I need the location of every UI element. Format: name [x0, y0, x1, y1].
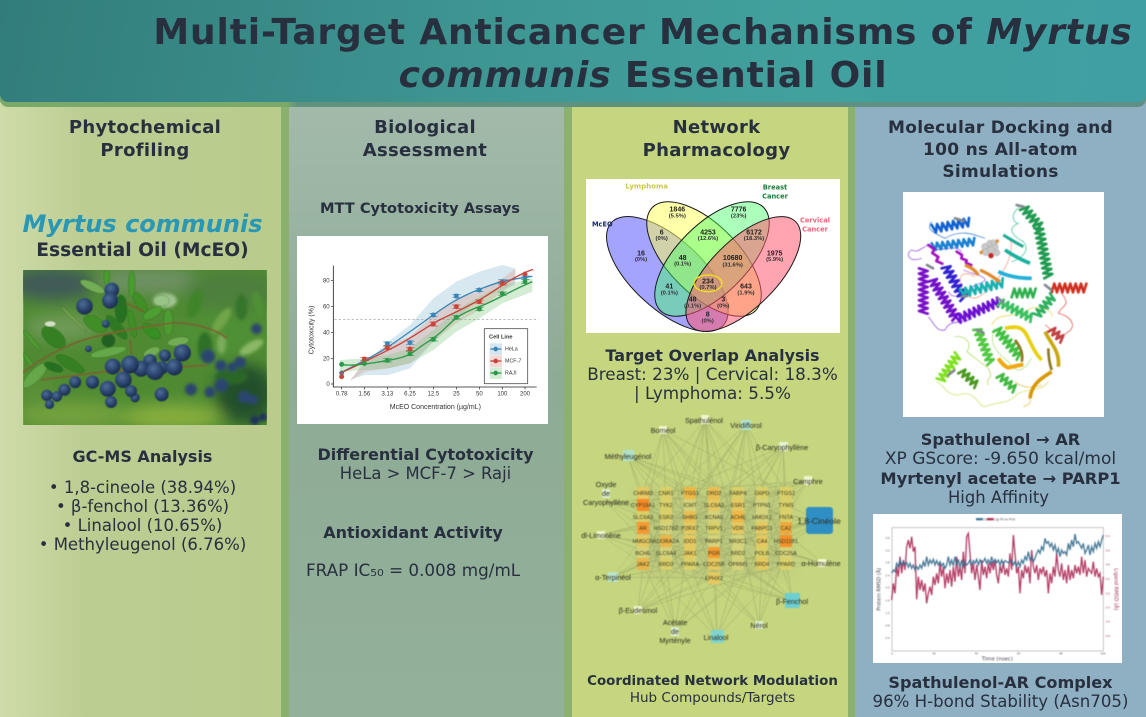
compound labels: β-Eudesmol — [619, 606, 658, 615]
target labels — [631, 491, 798, 582]
venn diagram: (12.6%) — [698, 236, 718, 242]
venn diagram: 234 — [702, 278, 714, 285]
compound labels: Myrtényle — [659, 636, 691, 645]
venn diagram: 8 — [706, 312, 710, 319]
photo: myrtle berries — [23, 270, 267, 425]
line chart: cytotoxicity: 20 — [323, 356, 330, 362]
target labels: BRD4 — [755, 562, 769, 568]
header banner — [0, 0, 1146, 107]
axis labels: 0 — [891, 652, 893, 656]
axis labels: 1.6 — [1106, 620, 1110, 624]
venn diagram: 3 — [721, 297, 725, 304]
venn diagram: 4253 — [700, 229, 716, 236]
target labels: OPRM1 — [728, 562, 748, 568]
legend — [484, 329, 528, 384]
line chart: cytotoxicity: 3.13 — [381, 392, 394, 398]
target labels: HMOX1 — [752, 515, 772, 521]
venn diagram: (31.6%) — [722, 262, 743, 268]
compound labels: dl-Limonène — [581, 531, 621, 540]
legend — [976, 518, 1015, 522]
axis labels: 0.8 — [1106, 634, 1110, 638]
line chart: cytotoxicity: 12.5 — [427, 392, 440, 398]
target labels: AR — [639, 526, 647, 532]
panel: phytochemical profiling background — [0, 102, 289, 717]
axis labels: 0.4 — [885, 636, 890, 640]
venn diagram: (0%) — [717, 303, 730, 309]
compound labels: Viridiflorol — [730, 421, 762, 430]
target labels: KCNA5 — [705, 515, 723, 521]
compound labels: β-Fenchol — [776, 597, 808, 606]
target labels: ADORA2A — [653, 539, 679, 545]
target labels: G6PD — [755, 491, 770, 497]
list: major constituents: • 1,8-cineole (38.94%) — [49, 478, 236, 496]
target labels: DRD2 — [707, 491, 721, 497]
list: major constituents — [39, 478, 246, 554]
series: MCF-7 — [339, 269, 533, 379]
list: major constituents: • Linalool (10.65%) — [63, 516, 222, 534]
axis labels: 1.6 — [885, 598, 890, 602]
line chart: cytotoxicity: 0 — [326, 382, 330, 388]
axis labels: 2.4 — [1106, 605, 1110, 609]
axis labels: 3.2 — [885, 548, 890, 552]
target labels: SHBG — [682, 515, 698, 521]
axis labels: 2.0 — [885, 586, 890, 590]
heading: coordinated network modulation: Coordinated Network Modulation — [587, 674, 838, 688]
target labels: IDO1 — [684, 539, 696, 545]
venn diagram: (0.7%) — [699, 285, 717, 291]
compound labels: α-Terpinéol — [595, 573, 631, 582]
heading: species name: Myrtus communis — [22, 210, 262, 238]
target labels: PPARD — [777, 562, 795, 568]
compound labels: Bornéol — [651, 426, 676, 435]
compound labels: Acétate — [663, 618, 687, 627]
axis labels: 20 — [932, 652, 936, 656]
venn diagram: Breast — [763, 183, 788, 191]
target labels: HSD17B2 — [654, 526, 678, 532]
venn diagram: (1.9%) — [737, 290, 755, 296]
heading: GC-MS analysis: GC-MS Analysis — [73, 447, 212, 466]
compound labels: α-Humulène — [801, 559, 841, 568]
heading: spathulenol-AR complex: Spathulenol-AR Complex — [888, 673, 1113, 692]
compound-target edges — [601, 420, 822, 637]
venn diagram: (0.1%) — [674, 262, 691, 268]
venn diagram: 7776 — [731, 207, 747, 214]
line chart: cytotoxicity: 25 — [453, 392, 460, 398]
target labels: CNR1 — [659, 491, 673, 497]
target labels: SLC6A3 — [633, 515, 653, 521]
alpha helices — [919, 207, 1086, 392]
list: major constituents: • Methyleugenol (6.76%) — [39, 534, 246, 554]
line chart: cytotoxicity: 40 — [323, 330, 330, 336]
beta sheets — [965, 235, 1059, 398]
line chart: cytotoxicity: 0.78 — [336, 392, 348, 398]
axis labels: 40 — [975, 652, 978, 656]
venn diagram — [586, 179, 840, 333]
venn diagram: 1975 — [767, 250, 783, 257]
line chart: cytotoxicity: 50 — [476, 392, 483, 398]
heading: phytochemical profiling — [69, 117, 221, 161]
list: major constituents: • β-fenchol (13.36%) — [56, 496, 229, 516]
target labels: TRPV1 — [705, 526, 723, 532]
axis labels: 80 — [1059, 652, 1063, 656]
compound labels: Caryophyllène — [583, 498, 629, 507]
axis labels: 6.4 — [1106, 534, 1110, 538]
compound labels: 1,8-Cinéole — [797, 516, 841, 526]
title — [153, 12, 1133, 96]
heading: molecular docking: 100 ns All-atom — [923, 140, 1078, 160]
heading: MTT assays: MTT Cytotoxicity Assays — [320, 200, 520, 217]
target labels: BCHE — [635, 551, 651, 557]
target labels: CA2 — [781, 526, 791, 532]
venn diagram: 1846 — [670, 207, 685, 214]
venn diagram: (23%) — [731, 213, 746, 219]
target labels: PPARA — [681, 562, 699, 568]
text: high affinity: High Affinity — [948, 488, 1049, 507]
target labels: HMGCR — [633, 539, 653, 545]
compound labels: Spathulénol — [685, 416, 723, 425]
compound labels: Oxyde — [596, 480, 616, 489]
target labels: ESR1 — [731, 503, 745, 509]
target labels: CYP19A1 — [631, 503, 655, 509]
venn diagram: McEO — [592, 221, 613, 229]
text: H-bond stability: 96% H-bond Stability (Asn705) — [873, 692, 1128, 711]
legend: RAJI — [505, 371, 517, 377]
venn diagram: (0.1%) — [684, 303, 701, 309]
axis labels: 2.8 — [885, 561, 890, 565]
compound labels: de — [671, 627, 679, 636]
text: potency order: HeLa > MCF-7 > Raji — [340, 464, 511, 483]
heading: differential cytotoxicity: Differential Cytotoxicity — [318, 445, 534, 464]
text: spathulenol docking: Spathulenol → AR — [921, 430, 1080, 449]
line chart: cytotoxicity: 80 — [323, 279, 330, 285]
axis labels — [885, 534, 1110, 656]
line chart: cytotoxicity: 200 — [520, 392, 531, 398]
title: Multi-Target Anticancer Mechanisms of Myrtus — [153, 12, 1133, 53]
axis labels: 1.2 — [885, 611, 890, 615]
line chart: cytotoxicity: Cytotoxicity (%) — [309, 306, 316, 354]
target labels: POLB — [755, 551, 770, 557]
target labels: PTGS2 — [777, 491, 795, 497]
venn diagram: 6172 — [746, 229, 762, 236]
text: FRAP value: FRAP IC₅₀ = 0.008 mg/mL — [306, 560, 520, 580]
target labels: FNTA — [779, 515, 793, 521]
compound labels — [581, 416, 841, 645]
axis labels: 5.6 — [1106, 548, 1110, 552]
venn diagram: Cervical — [800, 216, 830, 224]
heading: molecular docking: Molecular Docking and — [888, 118, 1113, 138]
line chart: cytotoxicity — [297, 236, 548, 424]
RMSD line chart — [873, 514, 1122, 663]
target labels: EPHX2 — [705, 576, 723, 582]
confidence bands — [340, 265, 532, 381]
venn diagram: 10680 — [723, 255, 743, 262]
venn diagram: (5.9%) — [766, 257, 783, 263]
target labels: BRD3 — [659, 562, 673, 568]
compound labels: β-Caryophyllène — [756, 443, 808, 452]
heading: network pharmacology — [643, 117, 790, 161]
axis labels: 0.8 — [885, 623, 890, 627]
venn diagram: 6 — [660, 229, 664, 236]
venn diagram: 48 — [689, 297, 697, 304]
heading: network pharmacology: Pharmacology — [643, 140, 790, 161]
panel: network pharmacology background — [572, 102, 855, 717]
heading: molecular docking: Simulations — [942, 162, 1059, 182]
line chart: cytotoxicity: 60 — [323, 305, 330, 311]
line chart: cytotoxicity: 100 — [497, 392, 508, 398]
compound labels: Linalool — [704, 633, 729, 642]
legend: HeLa — [505, 347, 518, 353]
target labels: TYMS — [778, 503, 794, 509]
venn diagram: (18.3%) — [744, 236, 764, 242]
target labels: PABPC1 — [751, 526, 773, 532]
venn diagram: 16 — [637, 250, 645, 257]
axes — [333, 266, 537, 387]
legend: Cell Line — [489, 334, 513, 340]
axis labels: 3.2 — [1106, 591, 1110, 595]
series: RAJI — [339, 279, 532, 367]
target labels: P2RX7 — [681, 526, 699, 532]
RMSD line chart: Time (nsec) — [981, 656, 1013, 662]
axis labels: 60 — [1017, 652, 1021, 656]
target labels: ESR2 — [659, 515, 673, 521]
line chart: cytotoxicity: 6.25 — [404, 392, 416, 398]
venn diagram: Cancer — [802, 225, 829, 233]
line chart: cytotoxicity: McEO Concentration (µg/mL) — [390, 404, 481, 411]
heading: phytochemical profiling: Profiling — [100, 140, 190, 161]
heading: target overlap: Target Overlap Analysis — [605, 346, 820, 365]
venn diagram: (0%) — [702, 318, 714, 324]
text: myrtenyl acetate docking: Myrtenyl acetate → PARP1 — [880, 469, 1121, 488]
venn diagram: 48 — [679, 255, 687, 262]
axis labels: 4.8 — [1106, 563, 1110, 567]
ligand in binding pocket — [982, 240, 1000, 258]
target labels: PGR — [708, 551, 720, 557]
venn diagram: 41 — [665, 284, 673, 291]
compound labels: de — [602, 489, 610, 498]
target labels: CA4 — [757, 539, 767, 545]
target labels: CDC25A — [775, 551, 797, 557]
ligand RMSD series — [892, 533, 1103, 603]
text: overlap percentages: Breast: 23% | Cervical: 18.3% — [587, 364, 838, 384]
target labels: PARP1 — [705, 539, 723, 545]
heading: biological assessment: Biological — [374, 117, 476, 138]
compound labels: Méthyleugénol — [605, 452, 652, 461]
line chart: cytotoxicity: 1.56 — [358, 392, 371, 398]
network graph — [580, 414, 841, 646]
target labels: PTGS1 — [681, 491, 699, 497]
heading: phytochemical profiling: Phytochemical — [69, 117, 221, 138]
title: communis Essential Oil — [399, 55, 887, 96]
protein RMSD series — [892, 534, 1103, 573]
RMSD line chart: Protein RMSD (Å) — [876, 568, 883, 611]
target labels: BRD2 — [731, 551, 745, 557]
axis labels: 2.4 — [885, 573, 890, 577]
venn diagram: (0%) — [635, 257, 647, 263]
grey helix segments — [927, 205, 1051, 375]
series: HeLa — [339, 275, 532, 375]
text: overlap percentages — [587, 364, 838, 403]
venn diagram: 643 — [740, 284, 752, 291]
heading: antioxidant activity: Antioxidant Activity — [323, 523, 503, 542]
panel: biological assessment background — [289, 102, 572, 717]
compound nodes — [597, 415, 833, 643]
heading: biological assessment: Assessment — [363, 140, 487, 161]
target labels: CHRM3 — [633, 491, 653, 497]
target labels: SLC6A2 — [704, 503, 724, 509]
text: XP GScore: XP GScore: -9.650 kcal/mol — [885, 449, 1116, 469]
target labels: TYK2 — [659, 503, 673, 509]
target labels: ICMT — [683, 503, 697, 509]
venn diagram: (0.1%) — [661, 290, 678, 296]
RMSD line chart: Ligand RMSD (Å) — [1113, 568, 1120, 610]
legend: Cα — [983, 518, 987, 522]
target labels: PTPN1 — [753, 503, 771, 509]
venn diagram: (0%) — [656, 236, 668, 242]
target labels: HSD11B1 — [774, 539, 798, 545]
compound labels: Camphre — [793, 477, 823, 486]
legend: Lig Fit on Prot — [994, 518, 1015, 522]
thin loops — [908, 205, 1072, 407]
venn diagram: Lymphoma — [625, 183, 668, 191]
target nodes — [637, 487, 792, 584]
axis labels: 100 — [1100, 652, 1106, 656]
axis labels: 3.6 — [885, 536, 890, 540]
venn diagram: Cancer — [762, 192, 789, 200]
heading: molecular docking — [888, 118, 1113, 182]
panel: molecular docking background — [855, 102, 1146, 717]
target labels: ACHE — [730, 515, 746, 521]
heading: essential oil: Essential Oil (McEO) — [36, 240, 249, 261]
legend: MCF-7 — [505, 359, 521, 365]
heading: network pharmacology: Network — [673, 117, 760, 138]
heading: biological assessment — [362, 117, 487, 161]
target labels: CDC25B — [703, 562, 725, 568]
venn diagram: (5.5%) — [669, 213, 686, 219]
axis labels: 4.0 — [1106, 577, 1110, 581]
text: hub compounds: Hub Compounds/Targets — [630, 690, 795, 706]
target labels: NR3C1 — [729, 539, 747, 545]
protein structure ribbon — [903, 192, 1104, 417]
target labels: JAK2 — [636, 562, 650, 568]
text: overlap percentages: | Lymphoma: 5.5% — [634, 383, 791, 403]
target labels: JAK1 — [683, 551, 697, 557]
compound labels: Nérol — [750, 621, 768, 630]
target labels: FABP4 — [729, 491, 747, 497]
target labels: SLC6A4 — [656, 551, 676, 557]
target labels: VDR — [732, 526, 744, 532]
